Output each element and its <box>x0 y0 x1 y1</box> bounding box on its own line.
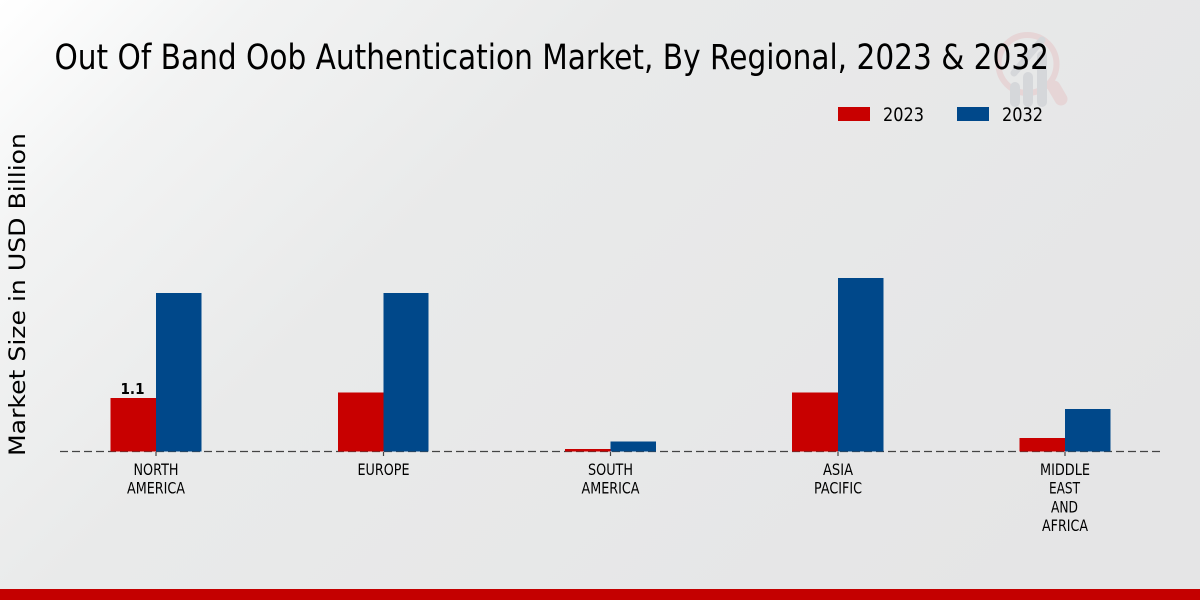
label: Asia Pacific: ASIA <box>823 460 853 479</box>
x axis labels: EAST <box>1049 478 1080 498</box>
y axis label: Market Size in USD Billion <box>5 133 31 456</box>
x axis labels: AMERICA <box>127 478 185 498</box>
legend <box>838 104 1043 126</box>
x axis labels <box>127 460 1090 535</box>
bars: South America <box>565 442 656 452</box>
label: Middle East and Africa: MIDDLE <box>1040 460 1090 479</box>
x axis labels: AND <box>1051 498 1078 516</box>
icon: watermark magnifier logo <box>998 35 1061 102</box>
footer bar <box>0 589 1200 600</box>
x axis baseline <box>60 452 1160 456</box>
legend: 2032: 2032 <box>1002 104 1043 126</box>
bars: North America <box>110 293 202 452</box>
bars: Middle East and Africa <box>1020 409 1110 452</box>
legend: 2023 <box>838 104 924 126</box>
bar chart <box>110 278 1110 452</box>
legend: 2023: 2023 <box>883 104 924 126</box>
bars: Asia Pacific <box>792 278 884 452</box>
x axis labels: AFRICA <box>1042 516 1088 535</box>
title: Out Of Band Oob Authentication Market, By Regional, 2023 & 2032 <box>54 38 1049 78</box>
label: South America: SOUTH <box>588 460 633 479</box>
label: Europe: EUROPE <box>358 460 410 479</box>
value label: 1.1 <box>120 380 144 398</box>
label: North America: NORTH <box>134 460 178 479</box>
legend: 2032 <box>957 104 1043 126</box>
x axis labels: AMERICA <box>582 478 640 498</box>
x axis labels: PACIFIC <box>814 478 862 498</box>
bars: Europe <box>338 293 428 452</box>
